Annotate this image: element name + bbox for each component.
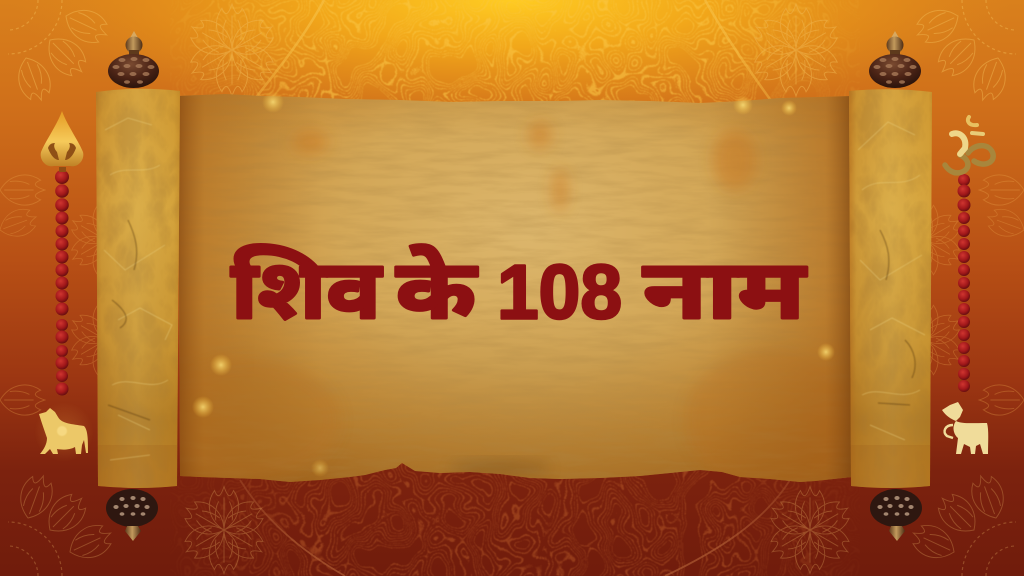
title: 108 [497,250,622,336]
icon: right bull [942,402,988,454]
icon: om [945,117,993,173]
icon: left bull [34,402,94,462]
title: के [396,244,478,336]
ornament: bottom line pattern [170,462,860,576]
ornament: side floral pattern [0,175,1024,415]
finial: bottom right [870,489,922,541]
icon: trident [41,111,83,172]
parchment panel [160,90,860,490]
title: शिव [231,245,383,336]
parchment glow spots [192,91,835,477]
finial: bottom left [106,489,158,541]
bead string: right [958,174,970,392]
right scroll roller [849,89,932,488]
ornament: bottom corner mandalas and roses [8,471,1016,576]
ornament: top line pattern [187,0,830,103]
left scroll roller [96,88,180,488]
finial: top left [108,31,159,88]
ornament: top corner mandalas and roses [8,0,1016,105]
title: नाम [643,245,807,336]
finial: top right [869,31,921,88]
bead string: left [55,170,69,396]
title [231,244,807,336]
